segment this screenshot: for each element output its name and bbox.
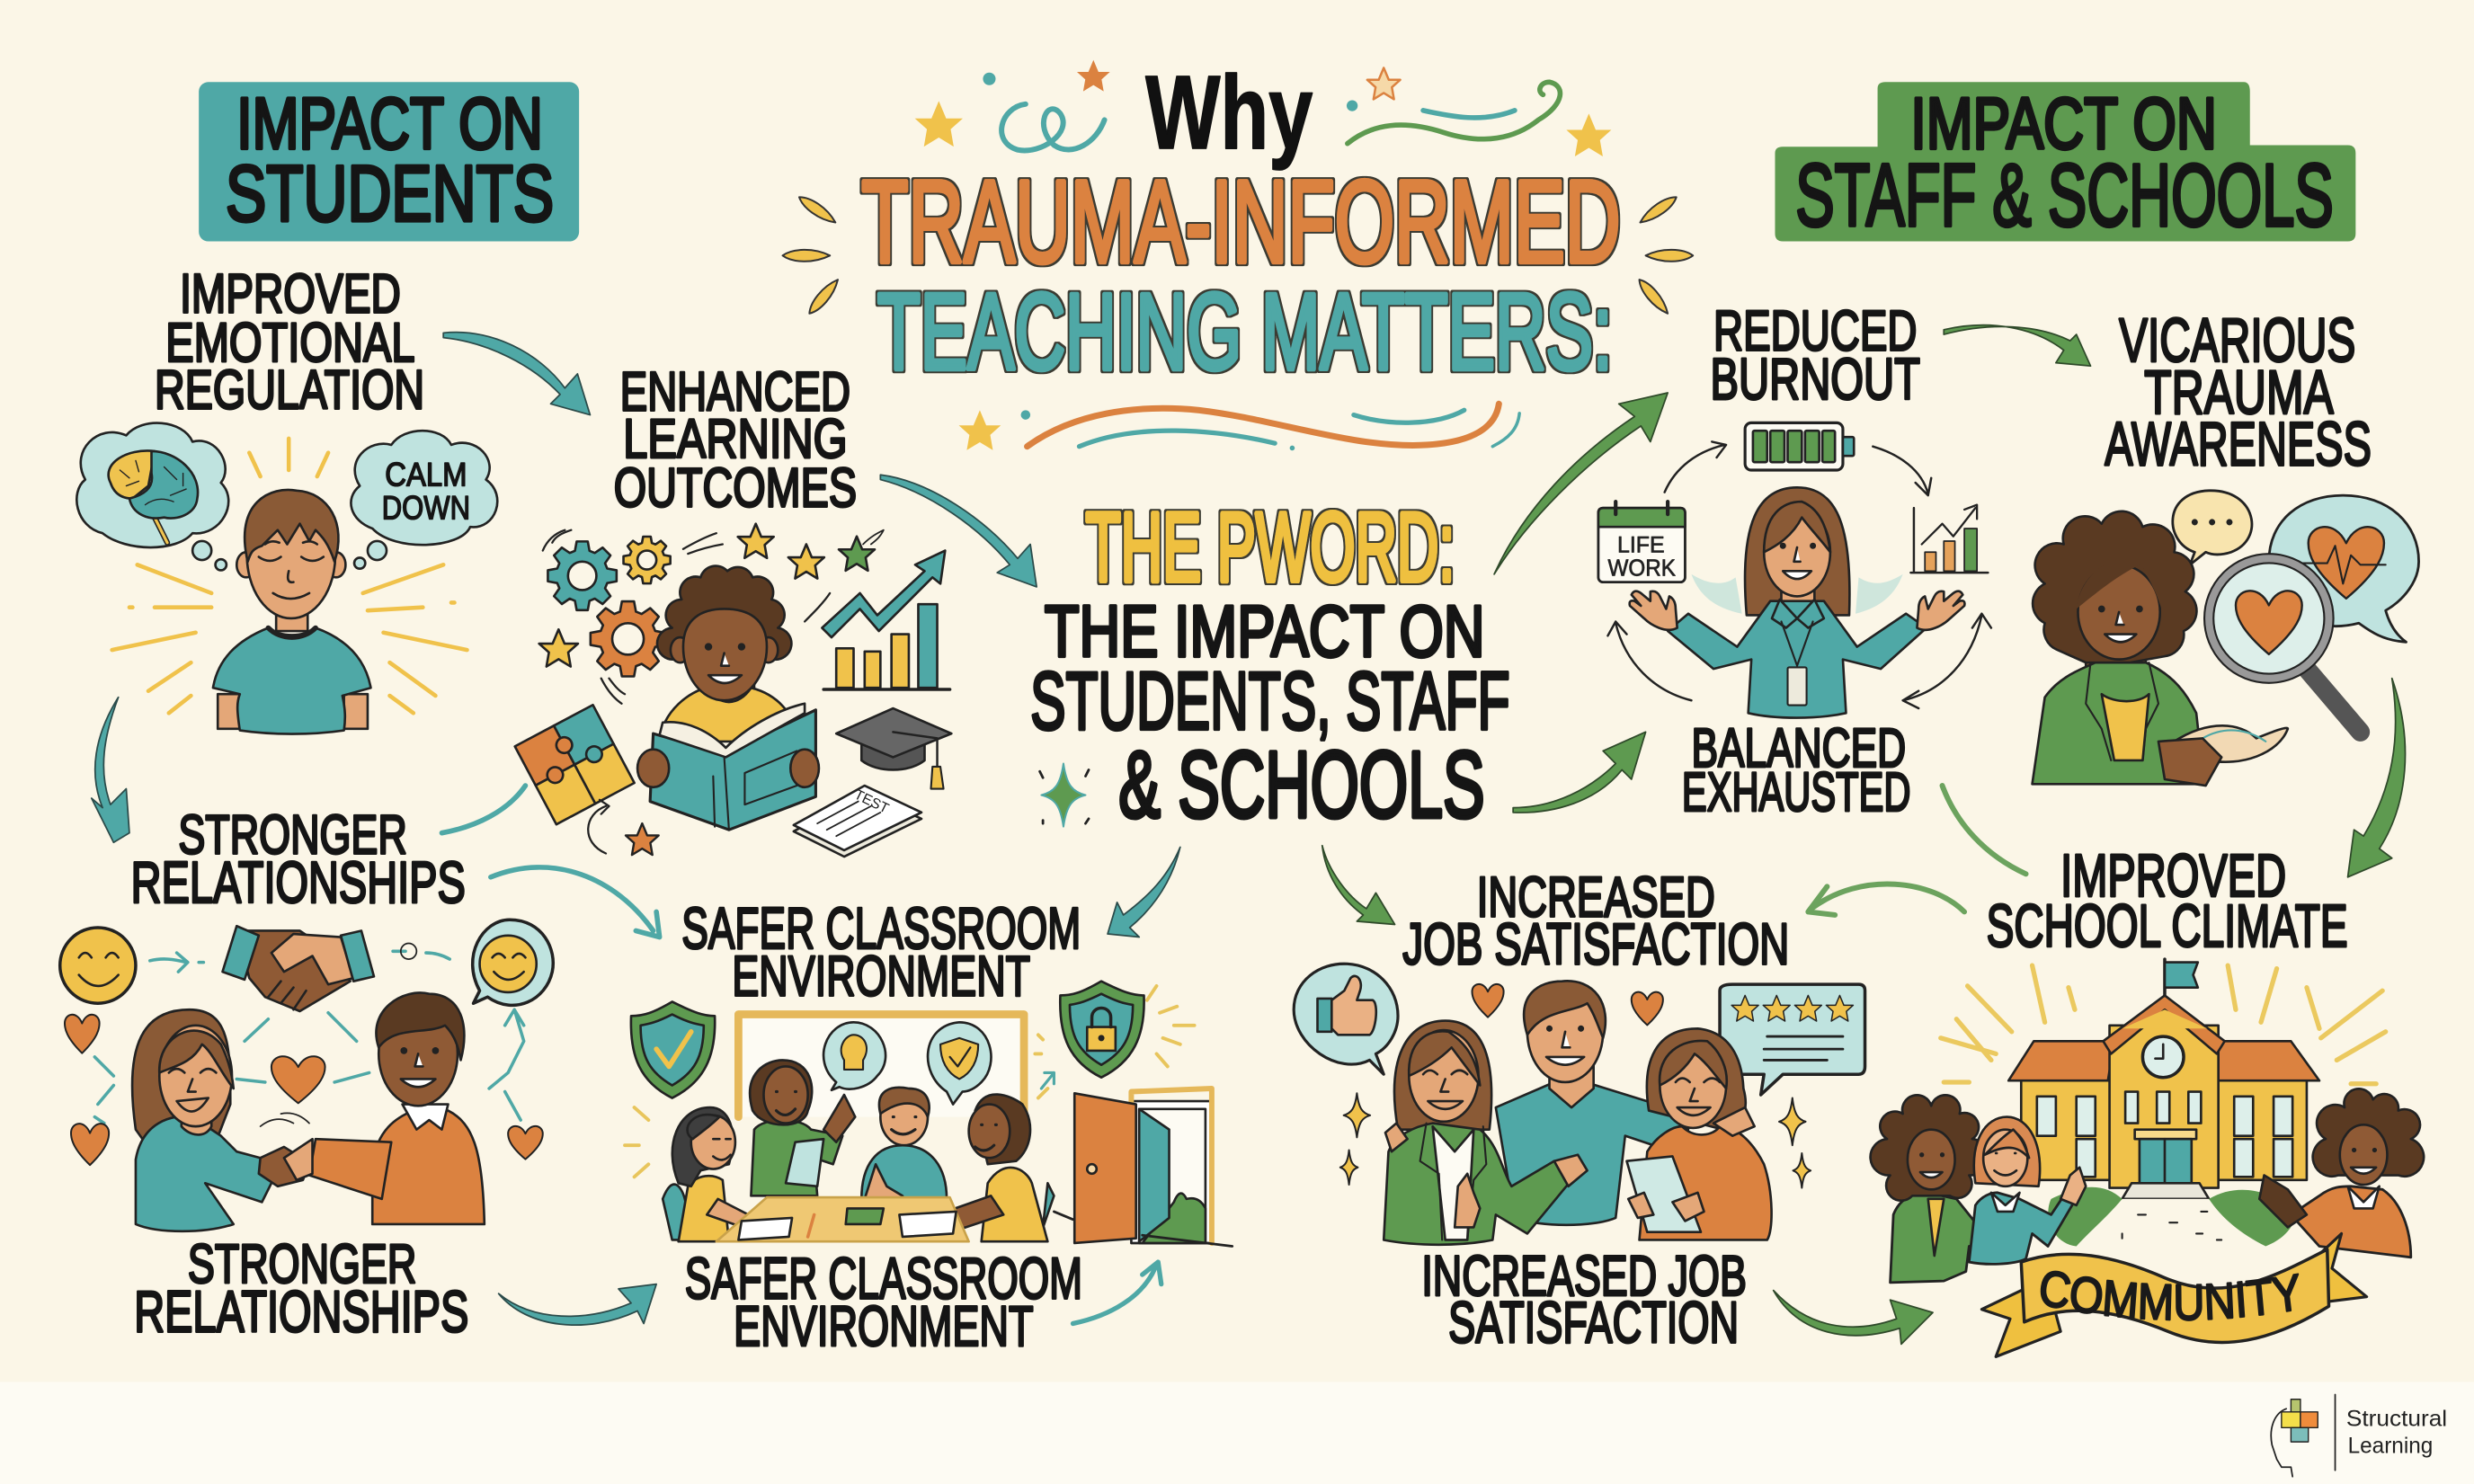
illustration: vicarious trauma awareness	[2033, 491, 2419, 786]
man right	[2259, 1089, 2424, 1257]
text: balanced exhausted	[1682, 717, 1910, 823]
illustration: calm boy	[76, 423, 497, 734]
illustration: happy staff	[1294, 964, 1865, 1245]
icon: calendar life work: WORK	[1607, 555, 1676, 582]
subtitle: THE IMPACT ON	[1045, 591, 1485, 672]
right shield	[1060, 982, 1144, 1078]
arrow: regulation to learning	[443, 333, 590, 415]
text: safer classroom lower	[685, 1245, 1082, 1358]
book	[650, 710, 815, 830]
clasped hands	[259, 1113, 313, 1186]
arrow: relationships to book	[441, 786, 525, 833]
test paper: TEST	[851, 787, 891, 817]
cycle arrow and star	[588, 800, 659, 855]
left woman	[1384, 1021, 1588, 1245]
text: stronger relationships lower: RELATIONSHIPS	[134, 1278, 468, 1344]
text: stronger relationships upper	[131, 804, 466, 915]
rays	[112, 439, 467, 713]
logo: structural learning: Learning	[2348, 1434, 2433, 1458]
puzzle	[515, 705, 635, 824]
panel: impact on students heading: IMPACT ON	[236, 84, 543, 164]
panel: impact on staff and schools heading	[1775, 82, 2355, 244]
illustration: boy reading with gears and chart	[515, 524, 951, 857]
text: improved school climate: IMPROVED	[2060, 843, 2286, 910]
arrow: centre to safer classroom	[1108, 847, 1180, 937]
yellow speech bubble	[2173, 491, 2252, 564]
text: safer classroom lower: ENVIRONMENT	[734, 1295, 1034, 1358]
test paper	[794, 786, 921, 857]
text: increased job satisfaction lower	[1421, 1245, 1747, 1355]
arrow: relationships to safer classroom	[491, 867, 660, 937]
teacher	[1630, 487, 1964, 718]
arrow: climate to job satisfaction	[1808, 884, 1964, 915]
text: improved emotional regulation: REGULATION	[155, 360, 424, 422]
text: vicarious trauma awareness: TRAUMA	[2144, 358, 2334, 427]
boy blue	[861, 1088, 947, 1212]
text: improved emotional regulation: EMOTIONAL	[165, 312, 415, 374]
arrow: balanced arc to climate	[1943, 786, 2026, 874]
title: TRAUMA-INFORMED	[861, 156, 1620, 287]
cycle arrows	[1607, 441, 1991, 708]
check bubble	[928, 1022, 991, 1105]
graduation cap	[836, 708, 951, 789]
table	[716, 1197, 969, 1241]
icon: battery	[1745, 422, 1854, 470]
arrow: schools to balanced	[1513, 732, 1646, 813]
reader	[700, 679, 754, 713]
hearts	[65, 1015, 543, 1165]
text: vicarious trauma awareness: VICARIOUS	[2119, 306, 2355, 375]
title decorations	[783, 60, 1693, 450]
boy figure	[218, 694, 368, 729]
left thought bubble	[76, 423, 228, 570]
panel: impact on staff and schools heading: IMPACT ON	[1910, 84, 2217, 164]
text: reduced burnout: REDUCED	[1713, 300, 1917, 363]
door	[1054, 1089, 1233, 1247]
text: increased job satisfaction upper: INCREASED	[1477, 866, 1715, 929]
woman	[2033, 511, 2288, 786]
illustration: balanced teacher	[1598, 422, 1991, 718]
icon: small bar chart	[1910, 505, 1988, 573]
subtitle: STUDENTS, STAFF	[1030, 655, 1510, 747]
icon: sparkle near schools	[1040, 763, 1089, 827]
text: safer classroom lower: SAFER CLASSROOM	[685, 1245, 1082, 1311]
text: stronger relationships lower: STRONGER	[188, 1233, 416, 1295]
smiley left	[60, 928, 136, 1003]
text: reduced burnout: BURNOUT	[1711, 346, 1920, 412]
right woman	[1627, 1028, 1772, 1240]
thumbs up bubble	[1294, 964, 1398, 1074]
text: enhanced learning outcomes: OUTCOMES	[614, 457, 857, 519]
arrow: vicarious to school climate	[2348, 679, 2405, 877]
icon: calendar life work: LIFE	[1617, 533, 1665, 557]
text: increased job satisfaction lower: INCREASED JOB	[1421, 1245, 1747, 1308]
arrow: centre to job satisfaction	[1322, 846, 1395, 924]
illustration: school and community	[1869, 957, 2425, 1358]
text: enhanced learning outcomes	[614, 360, 857, 519]
afro woman	[1871, 1095, 2020, 1283]
arrow: lower classroom to door	[1072, 1262, 1161, 1324]
arrow: relationships to classroom lower	[499, 1284, 656, 1325]
text: enhanced learning outcomes: ENHANCED	[620, 360, 850, 422]
review bubble	[1720, 984, 1865, 1095]
man	[309, 993, 485, 1224]
footer strip	[0, 1382, 2474, 1484]
text: improved emotional regulation	[155, 263, 424, 422]
illustration: classroom	[625, 982, 1233, 1247]
arrow: boy to stronger relationships	[92, 698, 129, 842]
text: increased job satisfaction upper: JOB SATISFACTION	[1402, 911, 1789, 976]
boy green	[750, 1060, 855, 1195]
small arrow	[1041, 1072, 1054, 1089]
arrow: outcomes to centre	[880, 475, 1037, 587]
text: increased job satisfaction lower: SATISFACTION	[1448, 1290, 1739, 1355]
central man	[1496, 981, 1688, 1225]
title: Why	[1145, 54, 1313, 171]
text: safer classroom upper: SAFER CLASSROOM	[681, 895, 1081, 961]
text: safer classroom upper	[681, 895, 1081, 1008]
logo: structural learning	[2271, 1394, 2447, 1477]
icon: calendar life work	[1598, 502, 1685, 582]
subtitle: & SCHOOLS	[1118, 733, 1485, 838]
rays	[1941, 965, 2386, 1084]
handshake icon	[222, 926, 374, 1011]
panel: impact on students heading	[199, 82, 579, 242]
magnifier	[2209, 558, 2361, 732]
title: TEACHING MATTERS:	[877, 271, 1613, 393]
boy yellow	[938, 1095, 1054, 1241]
connectors	[94, 951, 524, 1124]
board	[738, 1015, 1024, 1117]
hearts and sparkles	[1340, 984, 1811, 1188]
heart speech bubble	[2269, 495, 2419, 642]
text: vicarious trauma awareness	[2105, 306, 2372, 479]
girl	[1969, 1117, 2086, 1264]
right thought bubble: DOWN	[382, 489, 470, 526]
text: reduced burnout	[1711, 300, 1920, 412]
girl yellow	[663, 1107, 767, 1241]
text: stronger relationships upper: RELATIONSHIPS	[131, 849, 466, 915]
rays	[625, 986, 1195, 1177]
chart	[822, 551, 950, 689]
text: improved emotional regulation: IMPROVED	[180, 263, 401, 325]
community banner: COMMUNITY	[2041, 1271, 2300, 1321]
illustration: stronger relationships	[60, 920, 553, 1231]
subtitle: THE PWORD:	[1086, 493, 1455, 602]
left shield	[631, 1001, 715, 1098]
school building	[2008, 959, 2319, 1249]
text: enhanced learning outcomes: LEARNING	[623, 408, 847, 470]
logo: structural learning: Structural	[2346, 1408, 2447, 1432]
title	[861, 54, 1620, 393]
brain	[109, 451, 198, 543]
community banner	[1980, 1231, 2368, 1358]
text: stronger relationships lower	[134, 1233, 468, 1344]
text: improved school climate	[1987, 843, 2348, 960]
text: stronger relationships upper: STRONGER	[178, 804, 407, 866]
text: safer classroom upper: ENVIRONMENT	[732, 945, 1030, 1008]
arrow: burnout to vicarious	[1944, 325, 2090, 366]
bulb bubble	[823, 1022, 885, 1090]
smiley bubble right	[473, 920, 553, 1005]
right thought bubble: CALM	[385, 457, 467, 493]
stars	[539, 524, 884, 667]
woman	[132, 1009, 278, 1231]
arrow: satisfaction to community	[1774, 1291, 1933, 1344]
panel: impact on students heading: STUDENTS	[226, 150, 554, 238]
text: balanced exhausted: BALANCED	[1691, 717, 1906, 779]
gears	[543, 530, 723, 704]
arrow: centre to reduced burnout	[1494, 393, 1668, 574]
right thought bubble	[351, 431, 497, 569]
text: balanced exhausted: EXHAUSTED	[1682, 761, 1910, 823]
subtitle	[1030, 493, 1510, 838]
text: increased job satisfaction upper	[1402, 866, 1789, 976]
